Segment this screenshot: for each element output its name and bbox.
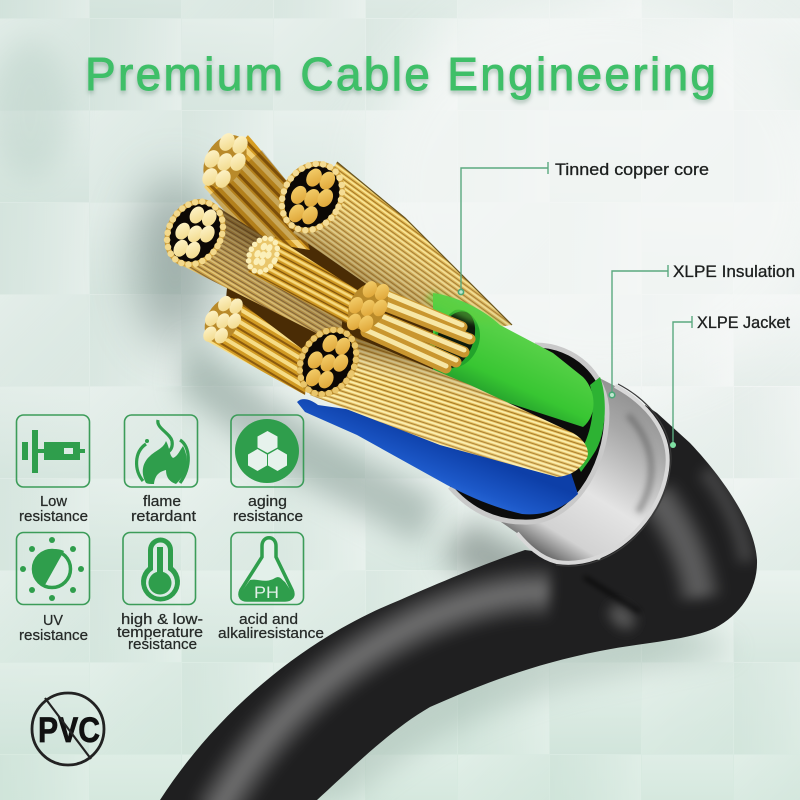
icon: hexagon molecule: [231, 415, 304, 487]
gold strands: shadowed bundle interior: [225, 200, 470, 400]
label: flame retardant: retardant: [131, 508, 197, 525]
feature: UV resistance: [16, 532, 90, 644]
label: aging resistance: resistance: [233, 508, 303, 525]
gold strand bundle: left hollow conductor: [156, 191, 345, 345]
title: Premium Cable Engineering: [85, 48, 716, 100]
label: XLPE jacket: XLPE Jacket: [697, 313, 790, 332]
gold strand bundle: lower left conductor: [197, 291, 310, 395]
label: UV resistance: [19, 612, 88, 644]
label: low resistance: resistance: [19, 508, 88, 525]
label: high and low temperature resistance: high & low-: [121, 611, 203, 628]
icon: thermometer: [123, 532, 196, 604]
label: aging resistance: [233, 493, 303, 525]
icon: resistor: [16, 415, 90, 487]
leader: tinned copper core: [458, 162, 548, 295]
label: high and low temperature resistance: resistance: [128, 636, 197, 653]
label: UV resistance: UV: [43, 612, 63, 629]
label: high and low temperature resistance: temperature: [117, 624, 203, 641]
label: acid and alkali resistance: alkaliresistance: [218, 625, 324, 642]
feature: acid and alkali resistance: [218, 532, 324, 642]
label: aging resistance: aging: [248, 493, 287, 510]
icon: PH flask: PH: [254, 583, 279, 602]
icon: sun half disc: [16, 532, 90, 604]
icon: flame: [124, 415, 198, 487]
gold strand bundle: small middle conductor: [241, 232, 365, 325]
feature: high and low temperature resistance: [117, 532, 203, 653]
feature: low resistance: [16, 415, 90, 525]
label: acid and alkali resistance: [218, 611, 324, 642]
leader: XLPE jacket: [670, 316, 692, 448]
gold strand bundle: right solid conductor: [340, 275, 470, 368]
gold strand bundle: lower hollow conductor: [288, 320, 588, 477]
leader: XLPE insulation: [609, 265, 668, 398]
feature: flame retardant: [124, 415, 198, 525]
label: UV resistance: resistance: [19, 627, 88, 644]
gold strand bundle: top solid conductor: [195, 127, 310, 250]
label: flame retardant: [131, 493, 197, 525]
blue core: [297, 399, 578, 514]
label: flame retardant: flame: [143, 493, 181, 510]
silver collar: XLPE insulation: [440, 345, 671, 566]
label: low resistance: [19, 493, 88, 525]
badge: no PVC: [32, 693, 104, 765]
label: low resistance: Low: [40, 493, 67, 510]
label: high and low temperature resistance: [117, 611, 203, 653]
label: XLPE insulation: XLPE Insulation: [673, 262, 795, 281]
badge: no PVC: PVC: [38, 711, 100, 750]
black cable: jacket tube with bend: [160, 405, 757, 800]
label: acid and alkali resistance: acid and: [239, 611, 298, 628]
label: tinned copper core: Tinned copper core: [555, 160, 709, 179]
green insulated core: [425, 291, 594, 427]
feature: aging resistance: [231, 415, 304, 525]
gold strand bundle: upper hollow conductor: [270, 152, 512, 335]
